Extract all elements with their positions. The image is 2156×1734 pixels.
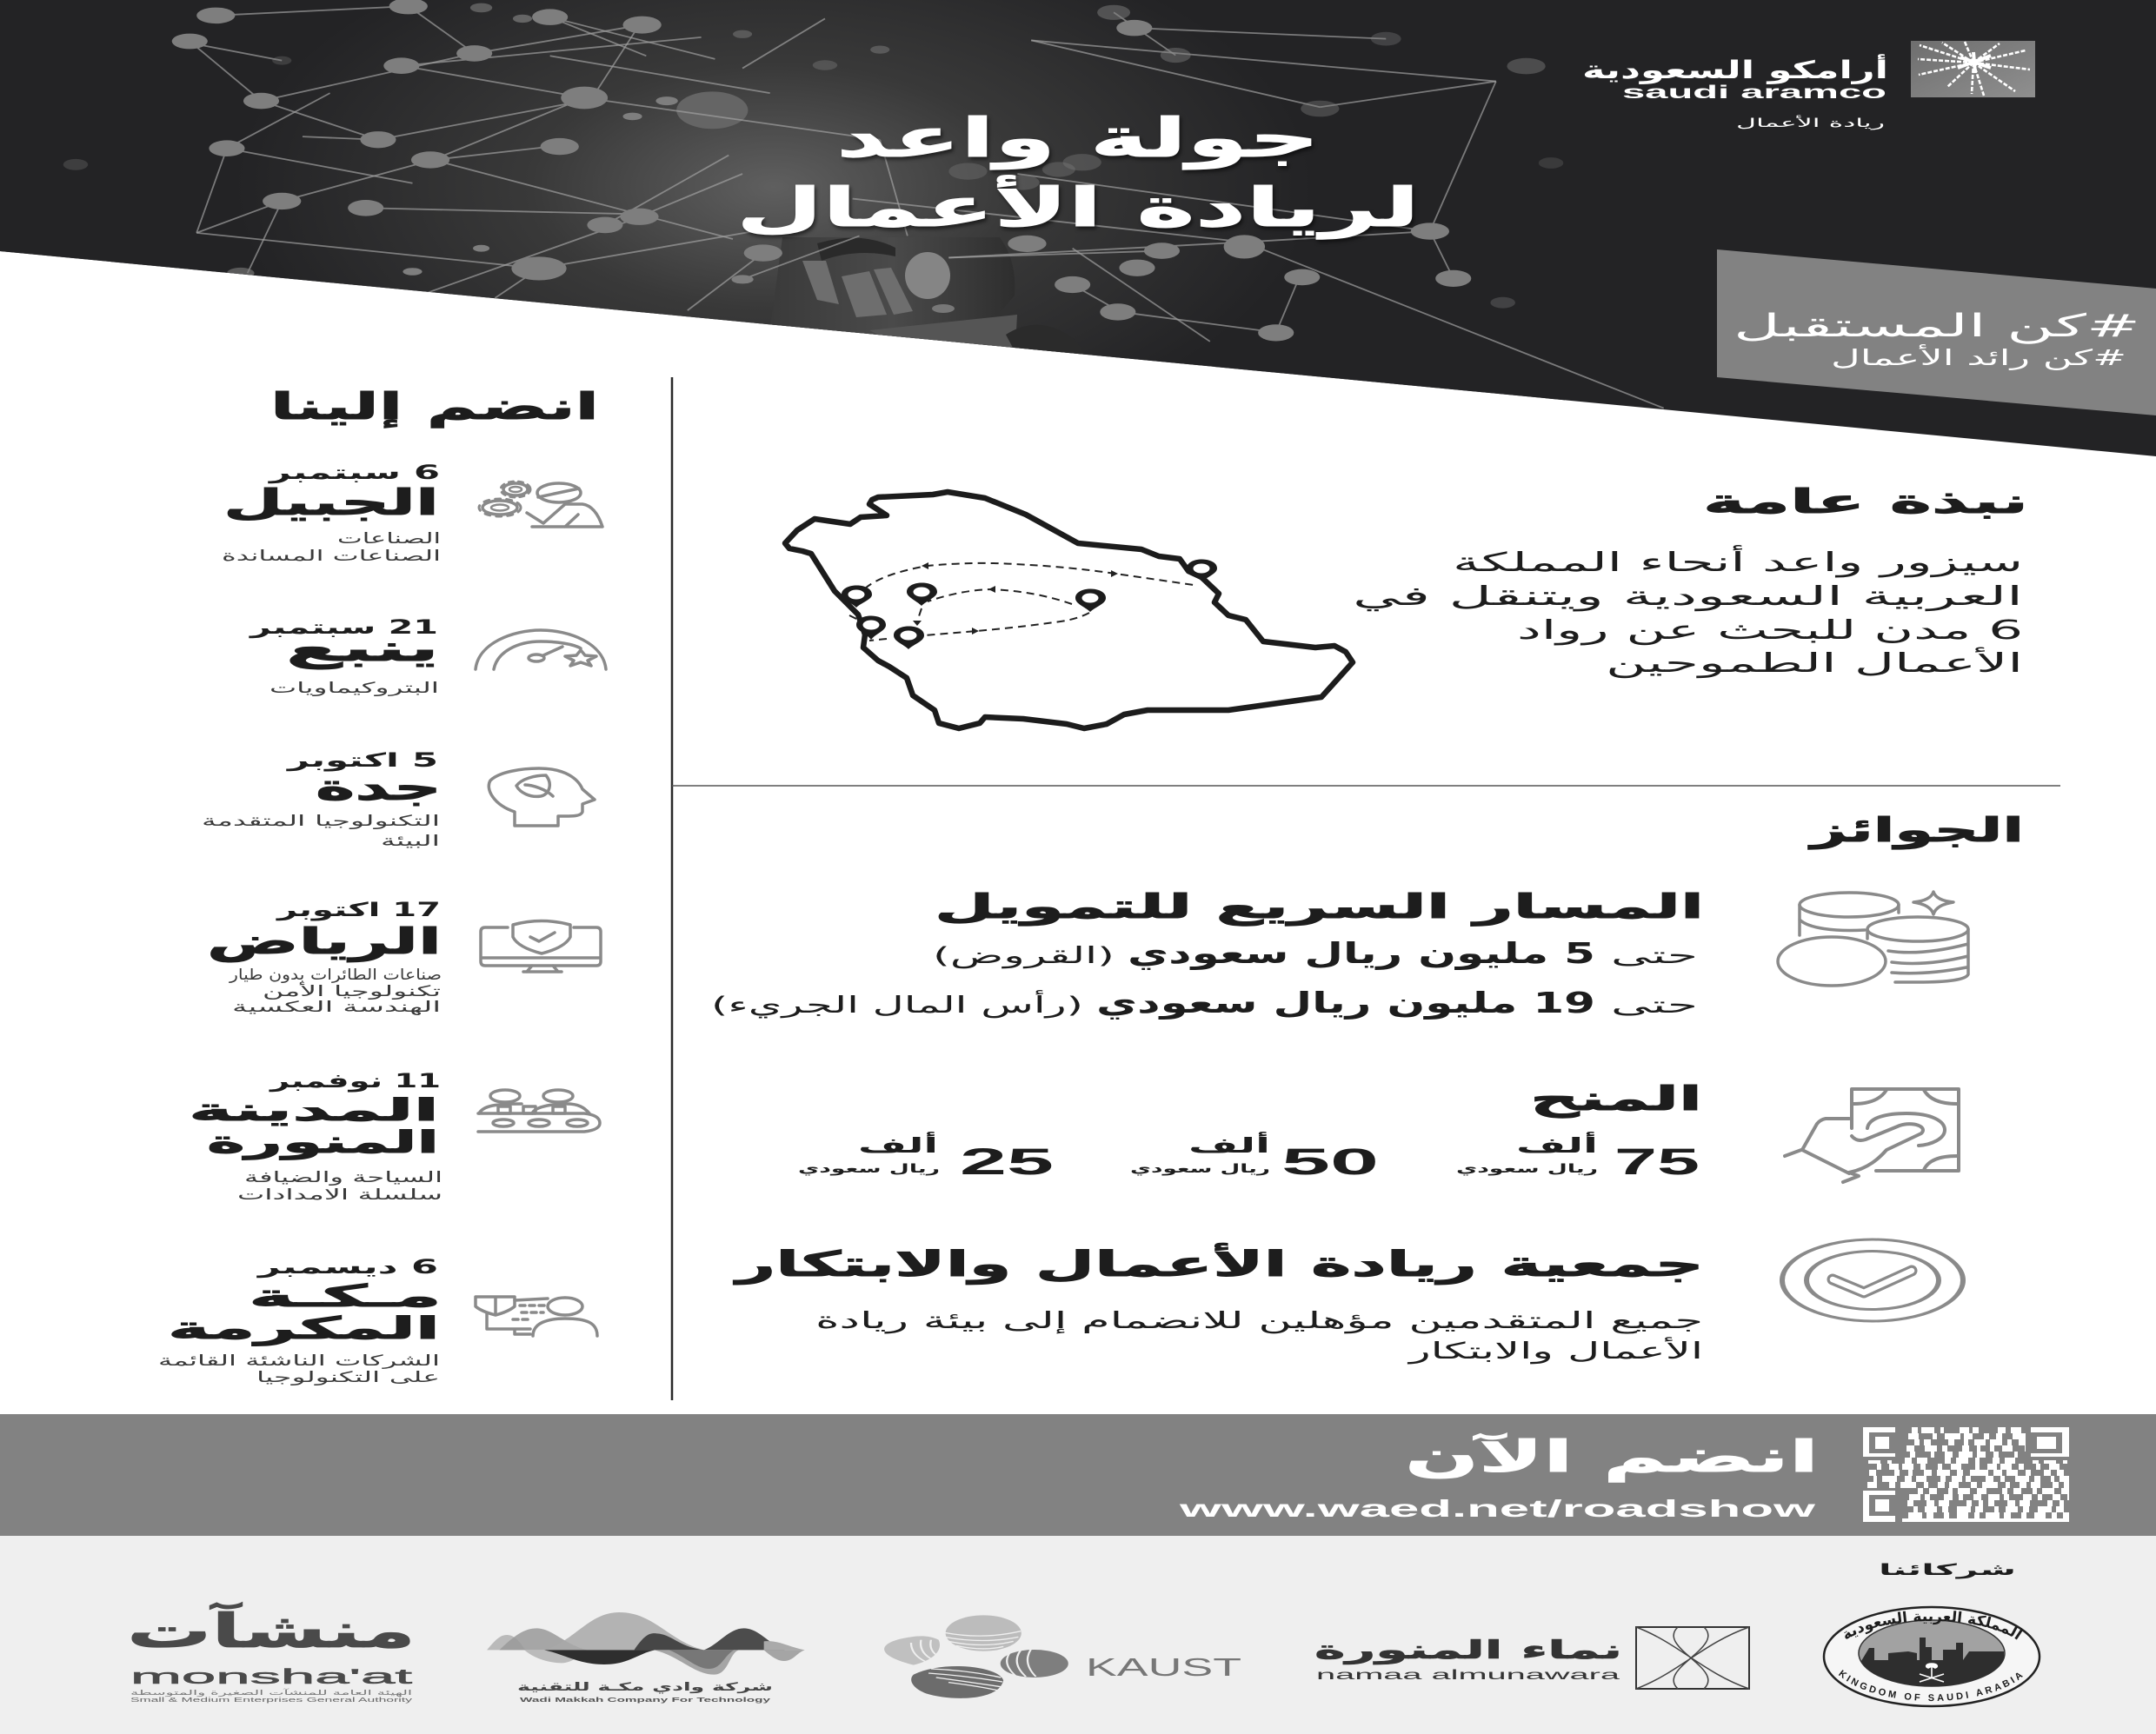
logo: Saudi Aramco: saudi aramco [1622, 83, 1886, 103]
city: Madinah [189, 1071, 443, 1204]
heading: prizes: الجوائز [1807, 811, 2024, 849]
panel: join now band [0, 1414, 2156, 1536]
title: لريادة الأعمال [736, 175, 1420, 239]
dashed routes [849, 563, 1194, 641]
fast track funding: المسار السريع للتمويل [935, 887, 1704, 926]
pins [842, 560, 1217, 649]
city: Riyadh [207, 900, 442, 1016]
logo: Monsha'at [127, 1602, 416, 1704]
heading: join us: انضم إلينا [270, 385, 599, 429]
entrepreneurship and innovation society [733, 1242, 1704, 1365]
hashtag panel [1717, 249, 2156, 415]
grants: 25 [960, 1141, 1054, 1183]
overview text block: العربية السعودية ويتنقل في [1353, 581, 2023, 612]
city: Riyadh: 17 اكتوبر [276, 900, 441, 921]
column divider [671, 377, 673, 1400]
logo: Saudi Aramco [1582, 41, 2035, 130]
grants: ألف [1516, 1132, 1598, 1158]
entrepreneurship and innovation society: جميع المتقدمين مؤهلين للانضمام إلى بيئة ريادة [815, 1308, 1703, 1334]
city: Makkah: المكرمة [168, 1312, 440, 1346]
logo: Namaa Almunawara: نماء المنورة [1314, 1635, 1622, 1664]
grants: 50 [1281, 1141, 1379, 1183]
grants: ريال سعودي [798, 1162, 940, 1177]
grants: 75 [1614, 1141, 1700, 1183]
entrepreneurship and innovation society: جمعية ريادة الأعمال والابتكار [733, 1242, 1704, 1285]
logo: KAUST [884, 1615, 1242, 1698]
fast track funding: حتى [1611, 943, 1698, 969]
icon: check badge [1782, 1239, 1963, 1321]
city: Jeddah: التكنولوجيا المتقدمة [202, 813, 440, 830]
fast track funding: (رأس المال الجريء) [711, 989, 1083, 1019]
logo: Wadi Makkah: Wadi Makkah Company For Technology [520, 1697, 770, 1704]
logo: Monsha'at: monsha'at [130, 1665, 413, 1689]
city: Madinah: المدينة [189, 1093, 439, 1128]
link: www.waed.net/roadshow [1178, 1495, 1815, 1522]
fast track funding: (القروض) [933, 943, 1115, 969]
title: جولة واعد [836, 106, 1320, 169]
city: Makkah: على التكنولوجيا [256, 1369, 440, 1386]
route arrows [913, 562, 1118, 634]
heading: partners: شركائنا [1879, 1561, 2016, 1579]
overview text block: سيزور واعد أنحاء المملكة [1453, 544, 2023, 578]
light bulb illustration [769, 237, 1085, 356]
title [736, 106, 1420, 239]
logo: Monsha'at: الهيئة العامة للمنشآت الصغيرة والمتوسطة [130, 1688, 412, 1697]
city: Jubail [222, 462, 441, 565]
logo: Monsha'at: منشآت [127, 1602, 416, 1658]
logo: Kingdom of Saudi Arabia emblem [1822, 1606, 2041, 1707]
logo: Namaa Almunawara [1314, 1627, 1749, 1689]
section divider [672, 785, 2060, 787]
hashtag panel: #كن رائد الأعمال [1831, 343, 2126, 370]
city: Jubail: 6 سبتمبر [268, 462, 440, 484]
city: Madinah: سلسلة الامدادات [237, 1186, 443, 1204]
icon: people at conveyor [478, 1090, 600, 1132]
icon: monitor with shield [481, 921, 601, 972]
logo: Saudi Aramco: أرامكو السعودية [1582, 54, 1888, 84]
KAUST symbol [884, 1615, 1068, 1698]
icon: startup person at screen [476, 1297, 597, 1336]
grants: ألف [1188, 1132, 1270, 1158]
grants [798, 1080, 1702, 1183]
entrepreneurship and innovation society: الأعمال والابتكار [1406, 1336, 1703, 1365]
icon: gauge [476, 630, 606, 669]
hashtag panel: #كن المستقبل [1733, 309, 2140, 344]
city: Makkah: مـكـة [249, 1279, 442, 1314]
logo: Wadi Makkah [487, 1612, 805, 1704]
hero banner background [0, 0, 2156, 461]
panel: prizes [711, 811, 2024, 1365]
logo: Kingdom of Saudi Arabia emblem: KINGDOM OF SAUDI ARABIA [1838, 1670, 2023, 1702]
heading: join now: انضم الآن [1405, 1432, 1819, 1482]
city: Yanbu: البتروكيماويات [270, 680, 439, 697]
city: Makkah: الشركات الناشئة القائمة [158, 1352, 440, 1370]
panel: partners [0, 1536, 2156, 1734]
logo: KAUST: KAUST [1086, 1654, 1242, 1682]
city: Jeddah: البيئة [381, 833, 440, 850]
icon: hand holding banknote [1785, 1089, 1959, 1182]
city: Madinah: المنورة [207, 1126, 439, 1160]
fast track funding: حتى [1611, 993, 1698, 1019]
map of Saudi Arabia with pins [785, 492, 1353, 728]
city: Jubail: الجبيل [223, 482, 439, 523]
logo: Monsha'at: Small & Medium Enterprises General Authority [130, 1697, 413, 1704]
panel: join us schedule [158, 385, 606, 1386]
QR code [1863, 1427, 2069, 1522]
logo: Kingdom of Saudi Arabia emblem: المملكة العربية السعودية [1844, 1611, 2022, 1639]
overview text block [1353, 544, 2023, 679]
fast track funding: 19 مليون ريال سعودي [1096, 986, 1595, 1020]
icon: head with leaf [489, 768, 595, 826]
city: Riyadh: صناعات الطائرات بدون طيار [229, 967, 442, 984]
grants: ريال سعودي [1456, 1162, 1598, 1177]
network illustration [63, 0, 1664, 409]
grants: ريال سعودي [1130, 1162, 1270, 1177]
logo star mark [1918, 42, 2030, 96]
city: Madinah: السياحة والضيافة [244, 1169, 443, 1186]
logo: Wadi Makkah: شركة وادي مكـة للتقنية [517, 1681, 773, 1694]
overview text block: الأعمال الطموحين [1606, 646, 2023, 679]
city: Yanbu: ينبع [286, 628, 439, 669]
icon: coins [1778, 892, 1968, 986]
panel: overview [785, 482, 2028, 728]
heading: overview: نبذة عامة [1703, 482, 2028, 521]
city: Yanbu [249, 617, 439, 697]
city: Riyadh: تكنولوجيا الأمن [263, 982, 442, 1000]
overview text block: 6 مدن للبحث عن رواد [1517, 615, 2023, 646]
fast track funding [711, 887, 1704, 1020]
wave symbol [487, 1612, 805, 1675]
city: Jeddah: جدة [316, 767, 442, 808]
city: Makkah [158, 1257, 442, 1386]
city: Jeddah: 5 اكتوبر [286, 750, 438, 772]
city: Riyadh: الهندسة العكسية [232, 999, 441, 1016]
logo: Namaa Almunawara: namaa almunawara [1316, 1668, 1620, 1683]
fast track funding: 5 مليون ريال سعودي [1128, 936, 1595, 971]
city: Riyadh: الرياض [207, 920, 442, 962]
city: Jubail: الصناعات [337, 530, 441, 548]
city: Makkah: 6 ديسمبر [256, 1257, 438, 1279]
grants: المنح [1530, 1080, 1702, 1118]
city: Jubail: الصناعات المساندة [222, 548, 441, 565]
city: Yanbu: 21 سبتمبر [249, 617, 438, 639]
icon: worker with gears [479, 482, 602, 527]
city: Madinah: 11 نوفمبر [269, 1071, 441, 1093]
grants: ألف [858, 1132, 938, 1158]
logo: Saudi Aramco: ريادة الأعمال [1736, 115, 1885, 130]
city: Jeddah [202, 750, 442, 850]
